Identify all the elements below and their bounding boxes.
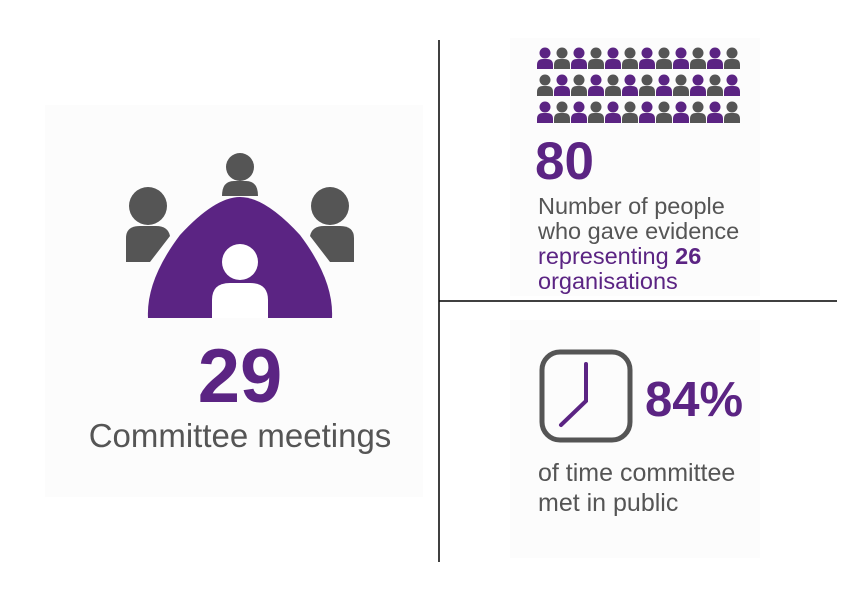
text: of time committee met in public: of time committee	[538, 459, 735, 487]
panel: meetings	[45, 105, 423, 497]
text: of time committee met in public: met in public	[538, 489, 678, 517]
panel: witnesses	[510, 38, 760, 296]
icon: meeting table	[126, 153, 354, 318]
panel: public meetings	[510, 320, 760, 558]
number: 29: 29	[198, 334, 282, 419]
icon: clock	[542, 352, 630, 440]
text: description: organisations	[538, 268, 678, 294]
text: description: representing 26	[538, 243, 701, 269]
text: description: who gave evidence	[537, 218, 739, 244]
text: of time committee met in public	[538, 459, 735, 517]
label: committee meetings: Committee meetings	[89, 417, 391, 454]
text: description	[537, 193, 739, 294]
icon grid: people	[537, 48, 740, 123]
number: 84%: 84%	[645, 373, 743, 427]
text: description: Number of people	[538, 193, 725, 219]
number: 80: 80	[535, 132, 594, 191]
